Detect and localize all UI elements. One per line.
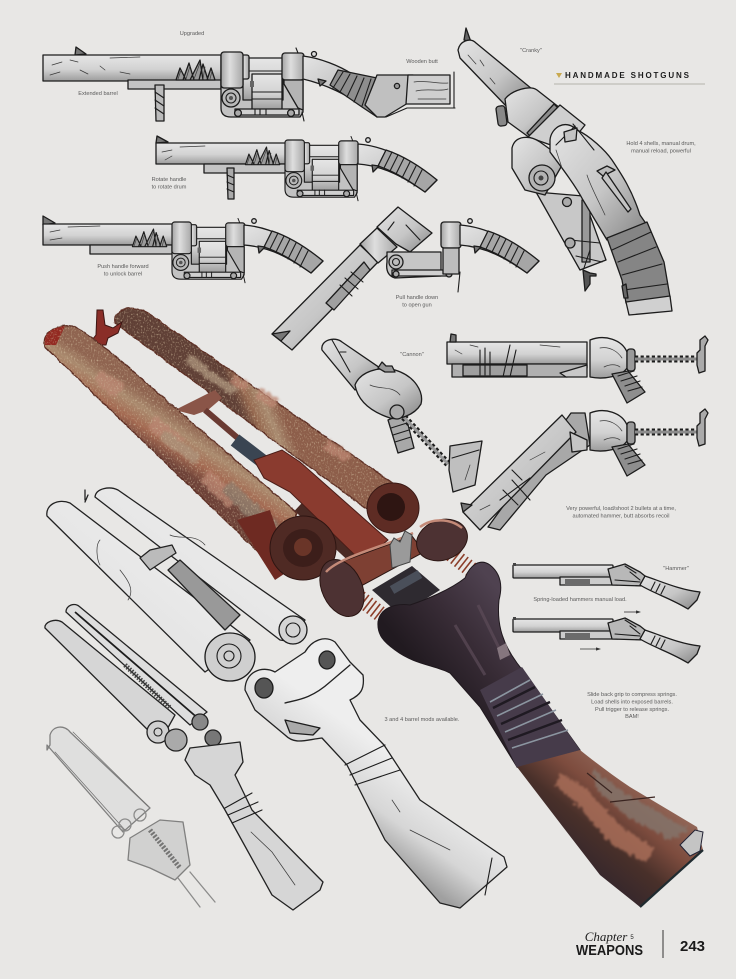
gun sketch: open gun, barrel pulled down (272, 207, 539, 350)
description: Hammer use: BAM! (625, 714, 639, 720)
spring yoke (311, 512, 478, 624)
wrapped grip binding (480, 667, 580, 768)
heading: Handmade Shotguns (554, 71, 705, 84)
description: Cranky: Hold 4 shells, manual drum, (626, 141, 696, 147)
line drawing: double barrel shotgun (47, 488, 507, 908)
hammer gun, closed (513, 563, 700, 609)
description: Cannon: Very powerful, load/shoot 2 bullets at a time, (566, 506, 676, 512)
label: rotate handle: to rotate drum (152, 184, 187, 190)
gun sketch: Cannon, closed (447, 334, 708, 403)
description: Cranky: manual reload, powerful (631, 149, 691, 155)
footer: chapter title: Chapter (585, 929, 628, 944)
description: spring-loaded hammers: Spring-loaded hammers manual load. (533, 597, 627, 603)
label: Upgraded: Upgraded (180, 31, 204, 37)
gun sketch: Cannon, angled (322, 339, 482, 492)
front barrel muzzle (237, 510, 336, 580)
rear barrel (115, 308, 413, 513)
description: Hammer use: Slide back grip to compress springs. (587, 692, 677, 698)
gun sketch: rotate drum (156, 136, 437, 201)
label: Wooden butt: Wooden butt (406, 59, 438, 65)
label: Extended barrel: Extended barrel (78, 91, 118, 97)
arrow: grip slide upper (624, 610, 641, 614)
line drawing: smaller double barrel shotgun (45, 605, 323, 910)
purple grip (378, 562, 580, 767)
gun sketch: unlock barrel (43, 216, 323, 283)
footer: chapter title: WEAPONS (576, 942, 643, 959)
description: Cannon: automated hammer, butt absorbs recoil (572, 513, 670, 519)
label: pull handle: Pull handle down (396, 295, 438, 301)
label: rotate handle: Rotate handle (152, 177, 186, 183)
heading: Handmade Shotguns: HANDMADE SHOTGUNS (565, 71, 690, 80)
footer: chapter title: 5 (630, 935, 634, 941)
footer: chapter title (576, 929, 643, 959)
hammer gun, grip slid back (513, 617, 700, 663)
footer: divider (662, 930, 664, 958)
label: Hammer: "Hammer" (663, 566, 689, 572)
arrow: grip slide lower (580, 647, 601, 651)
central rod and mechanism (175, 390, 388, 570)
label: Cranky: "Cranky" (520, 48, 542, 54)
wooden butt (517, 750, 703, 907)
rear barrel muzzle (367, 483, 419, 533)
painted gun: rusty double barrel shotgun (44, 308, 703, 907)
label: pull handle: to open gun (402, 302, 432, 308)
label: barrel mods: 3 and 4 barrel mods available. (385, 717, 460, 723)
gun sketch: Cranky shotgun (458, 28, 672, 315)
gun sketch: upgraded shotgun with wooden butt (43, 47, 455, 121)
description: Hammer use: Pull trigger to release springs. (595, 707, 669, 713)
forward sight bracket (88, 310, 122, 345)
footer: page number: 243 (680, 938, 705, 955)
gun sketch: Cannon, barrel open (461, 409, 708, 530)
front barrel (44, 326, 297, 570)
description: Hammer use: Load shells into exposed barrels. (591, 699, 673, 705)
line drawing: faint thumbnail sketch (47, 727, 215, 907)
label: Cannon: "Cannon" (400, 352, 424, 358)
label: push handle: Push handle forward (97, 264, 149, 270)
label: push handle: to unlock barrel (104, 271, 142, 277)
